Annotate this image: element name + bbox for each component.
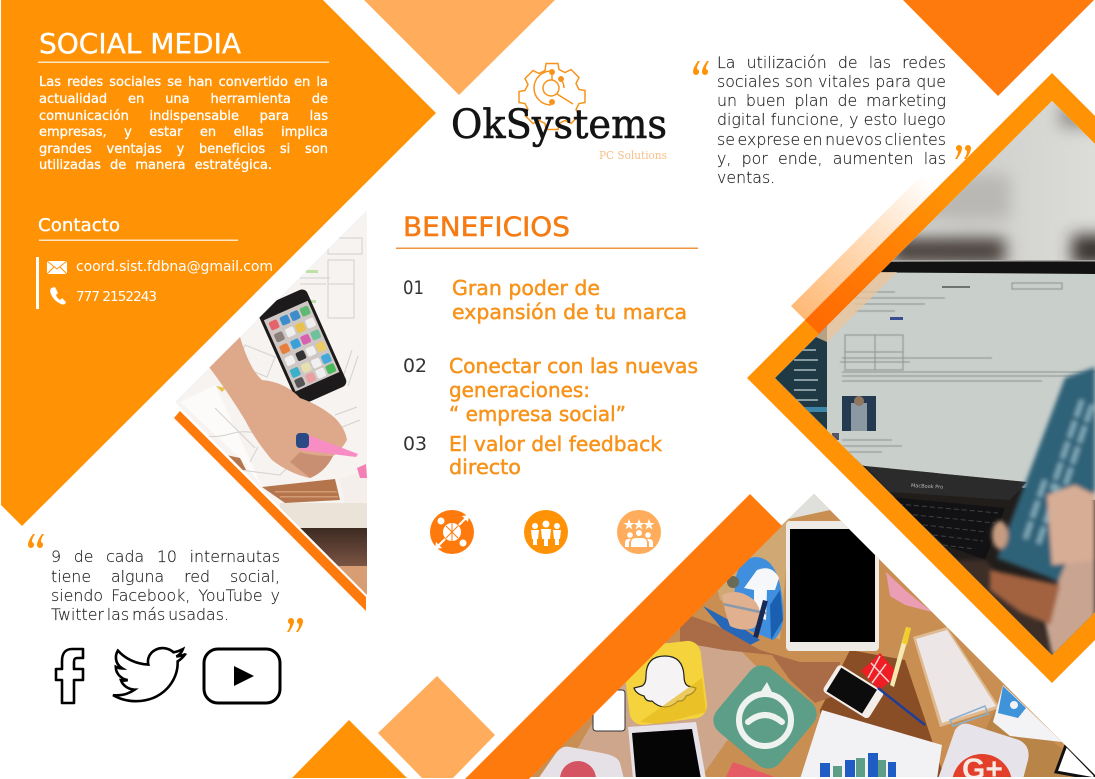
text block: social media intro: la: [316, 75, 328, 90]
text block: social media intro: se: [167, 75, 182, 90]
white phone: [593, 690, 625, 731]
icon: gear with circuit: [519, 64, 585, 130]
text block: quote redes sociales: y: [849, 110, 858, 129]
text block: quote internautas: Twitter: [51, 605, 104, 624]
orange frame: laptop diamond: [747, 73, 1095, 683]
text block: quote internautas: cada: [106, 547, 144, 566]
text block: quote redes sociales: luego: [903, 110, 946, 129]
text block: quote internautas: y: [271, 586, 280, 605]
text block: quote redes sociales: para: [875, 72, 911, 91]
icon: global expansion: [430, 510, 474, 554]
text block: social media intro: en: [128, 92, 144, 107]
text block: quote redes sociales: ventas.: [717, 168, 775, 187]
photo: social media tiles on desk: [520, 490, 1095, 779]
text block: quote internautas: usadas.: [168, 605, 229, 624]
text block: quote redes sociales: de: [837, 91, 857, 110]
icon: rated community: [617, 510, 661, 554]
decorative diamond: bottom centre: [378, 676, 495, 778]
icon: twitter: [113, 648, 185, 701]
text block: quote redes sociales: esto: [864, 110, 897, 129]
icon tile: pinterest: [538, 747, 624, 779]
text block: social media intro: en: [200, 125, 216, 140]
text block: quote redes sociales: son: [785, 72, 813, 91]
chart paper: [800, 710, 942, 779]
heading: beneficios: BENEFICIOS: [403, 212, 570, 243]
text block: social media intro: y: [177, 142, 184, 157]
arm and hand: [680, 576, 840, 703]
orange stripe beside desk photo: [465, 494, 782, 779]
text block: quote internautas: red: [184, 567, 210, 586]
text block: social media intro: para: [260, 109, 289, 124]
text block: social media intro: de: [110, 158, 126, 173]
text block: social media intro: indispensable: [149, 109, 239, 124]
laptop body: [856, 459, 1095, 655]
text block: social media intro: y: [124, 125, 132, 140]
tan gradient overlap on photo: [816, 272, 897, 342]
decorative triangle: bottom left: [292, 720, 407, 778]
hand: [209, 337, 347, 478]
text block: social media intro: sociales: [109, 75, 161, 90]
text block: quote redes sociales: ende,: [778, 149, 822, 168]
screen: [827, 272, 1095, 500]
text block: quote redes sociales: exprese: [738, 130, 800, 149]
text block: social media intro: son: [305, 142, 328, 157]
text block: social media intro: convertido: [219, 75, 288, 90]
text block: quote internautas: más: [132, 605, 165, 624]
text block: quote internautas: social,: [230, 567, 280, 586]
text block: social media intro: en: [294, 75, 310, 90]
chat photo: [842, 396, 876, 431]
text block: quote redes sociales: sociales: [717, 72, 780, 91]
decorative triangle: top centre: [364, 0, 555, 95]
text block: quote redes sociales: un: [717, 91, 737, 110]
text block: social media intro: redes: [67, 75, 103, 90]
text block: social media intro: comunicación: [39, 109, 129, 124]
text block: quote redes sociales: utilización: [747, 53, 827, 72]
text block: quote redes sociales: aumenten: [833, 149, 913, 168]
text block: quote internautas: YouTube: [198, 586, 263, 605]
tablet bottom: [628, 722, 706, 779]
icon: envelope: [47, 261, 67, 274]
text block: quote redes sociales: se: [717, 130, 735, 149]
text block: social media intro: una: [165, 92, 190, 107]
text block: quote redes sociales: y,: [717, 149, 731, 168]
icon tile: snapchat: [622, 639, 709, 726]
logo: OkSystems: [451, 64, 667, 162]
text block: social media intro: estar: [149, 125, 182, 140]
text block: social media intro: han: [188, 75, 213, 90]
icon: phone: [50, 287, 66, 304]
quote marks: redes sociales: [693, 61, 971, 159]
text block: quote redes sociales: nuevos: [825, 130, 882, 149]
text block: social media intro: ventajas: [107, 142, 162, 157]
text block: social media intro: implica: [281, 125, 328, 140]
text block: social media intro: de: [312, 92, 328, 107]
photo: hand with phone on desk: [170, 205, 370, 606]
text block: social media intro: Las: [39, 75, 61, 90]
text block: social media intro: las: [310, 109, 328, 124]
text block: quote redes sociales: por: [742, 149, 768, 168]
benefit 02: Conectar con las nuevas: [449, 354, 698, 378]
logo wordmark: OkSystems: [451, 102, 667, 148]
text block: social media intro: ellas: [234, 125, 264, 140]
quote marks: internautas: [28, 534, 303, 632]
benefit 02: [403, 354, 698, 426]
icon: youtube: [204, 649, 280, 703]
text block: quote redes sociales: que: [916, 72, 946, 91]
text block: quote redes sociales: de: [838, 53, 858, 72]
icon tile: blue paper: [993, 685, 1062, 742]
text block: quote internautas: 9: [51, 547, 61, 566]
benefit 01: expansión de tu marca: [452, 300, 687, 324]
pencil: [890, 627, 911, 687]
text block: social media intro: empresas,: [39, 125, 107, 140]
benefit 03: [403, 432, 662, 479]
panel: social media orange background: [1, 0, 436, 526]
text block: quote internautas: tiene: [51, 567, 91, 586]
text block: quote internautas: las: [107, 605, 129, 624]
text block: quote redes sociales: plan: [794, 91, 829, 110]
dark sidebar: [775, 326, 827, 430]
rubik cube: [861, 653, 899, 690]
text block: quote redes sociales: funcione,: [771, 110, 844, 129]
benefit 03: El valor del feedback: [449, 432, 662, 456]
smartphone on desk: [822, 664, 885, 720]
text block: social media intro: si: [280, 142, 290, 157]
text block: quote redes sociales: redes: [902, 53, 946, 72]
benefit 01: [403, 276, 687, 324]
logo tagline: PC Solutions: [599, 149, 667, 162]
heading: contacto: Contacto: [38, 215, 120, 236]
text block: social media intro: [39, 75, 328, 173]
phone: [259, 290, 346, 402]
phone number: 777 2152243: [76, 289, 157, 305]
text block: quote internautas: Facebook,: [111, 586, 190, 605]
text block: social media intro: herramienta: [211, 92, 291, 107]
text block: social media intro: manera: [135, 158, 186, 173]
benefit 03: directo: [449, 455, 521, 479]
text block: social media intro: beneficios: [199, 142, 265, 157]
heading: social media: SOCIAL MEDIA: [39, 28, 241, 60]
text block: quote redes sociales: las: [924, 149, 946, 168]
text block: quote internautas: internautas: [190, 547, 280, 566]
contact details: [36, 257, 273, 309]
text block: quote internautas: de: [74, 547, 93, 566]
text block: quote internautas: alguna: [111, 567, 164, 586]
blue pen: [878, 688, 925, 725]
text block: social media intro: utilizadas: [39, 158, 101, 173]
red tile: [726, 762, 774, 777]
orange stripe under hand photo: [174, 411, 366, 611]
text block: quote internautas: siendo: [51, 586, 103, 605]
MacBook label: MacBook Pro: [911, 483, 943, 491]
icon: facebook: [56, 649, 83, 703]
benefit 02: generaciones:: [449, 378, 590, 402]
black phone: [1056, 745, 1095, 779]
text block: quote redes sociales: La: [717, 53, 735, 72]
benefit 03: 03: [403, 433, 427, 455]
text block: quote redes sociales: vitales: [818, 72, 870, 91]
marker: [300, 433, 358, 457]
email: coord.sist.fdbna@gmail.com: [76, 259, 273, 275]
icon: people group: [524, 510, 568, 554]
text block: quote redes sociales: clientes: [885, 130, 946, 149]
gradient stripe over frame: [791, 172, 961, 342]
photo: laptop and phone: [770, 100, 1095, 660]
text block: quote redes sociales: [717, 53, 946, 187]
tablet: [786, 521, 879, 651]
text block: social media intro: estratégica.: [195, 158, 272, 173]
hand and phone: [990, 367, 1095, 660]
text block: quote internautas: [51, 547, 280, 624]
benefit 01: Gran poder de: [452, 276, 600, 300]
text block: quote redes sociales: buen: [746, 91, 786, 110]
notebook: [913, 627, 1000, 727]
text block: quote redes sociales: digital: [717, 110, 766, 129]
benefit 01: 01: [403, 277, 424, 299]
text block: quote redes sociales: las: [869, 53, 891, 72]
benefit 02: 02: [403, 355, 427, 377]
icon tile: google plus: [938, 724, 1029, 779]
icon tile: whatsapp: [713, 665, 817, 769]
text block: social media intro: grandes: [39, 142, 92, 157]
decorative triangle: top right: [903, 0, 1094, 96]
text block: quote internautas: 10: [157, 547, 177, 566]
benefit 02: “ empresa social”: [449, 402, 626, 426]
text block: quote redes sociales: marketing: [866, 91, 946, 110]
icon tile: facebook: [703, 557, 783, 650]
text block: quote redes sociales: en: [803, 130, 822, 149]
text block: social media intro: actualidad: [39, 92, 107, 107]
